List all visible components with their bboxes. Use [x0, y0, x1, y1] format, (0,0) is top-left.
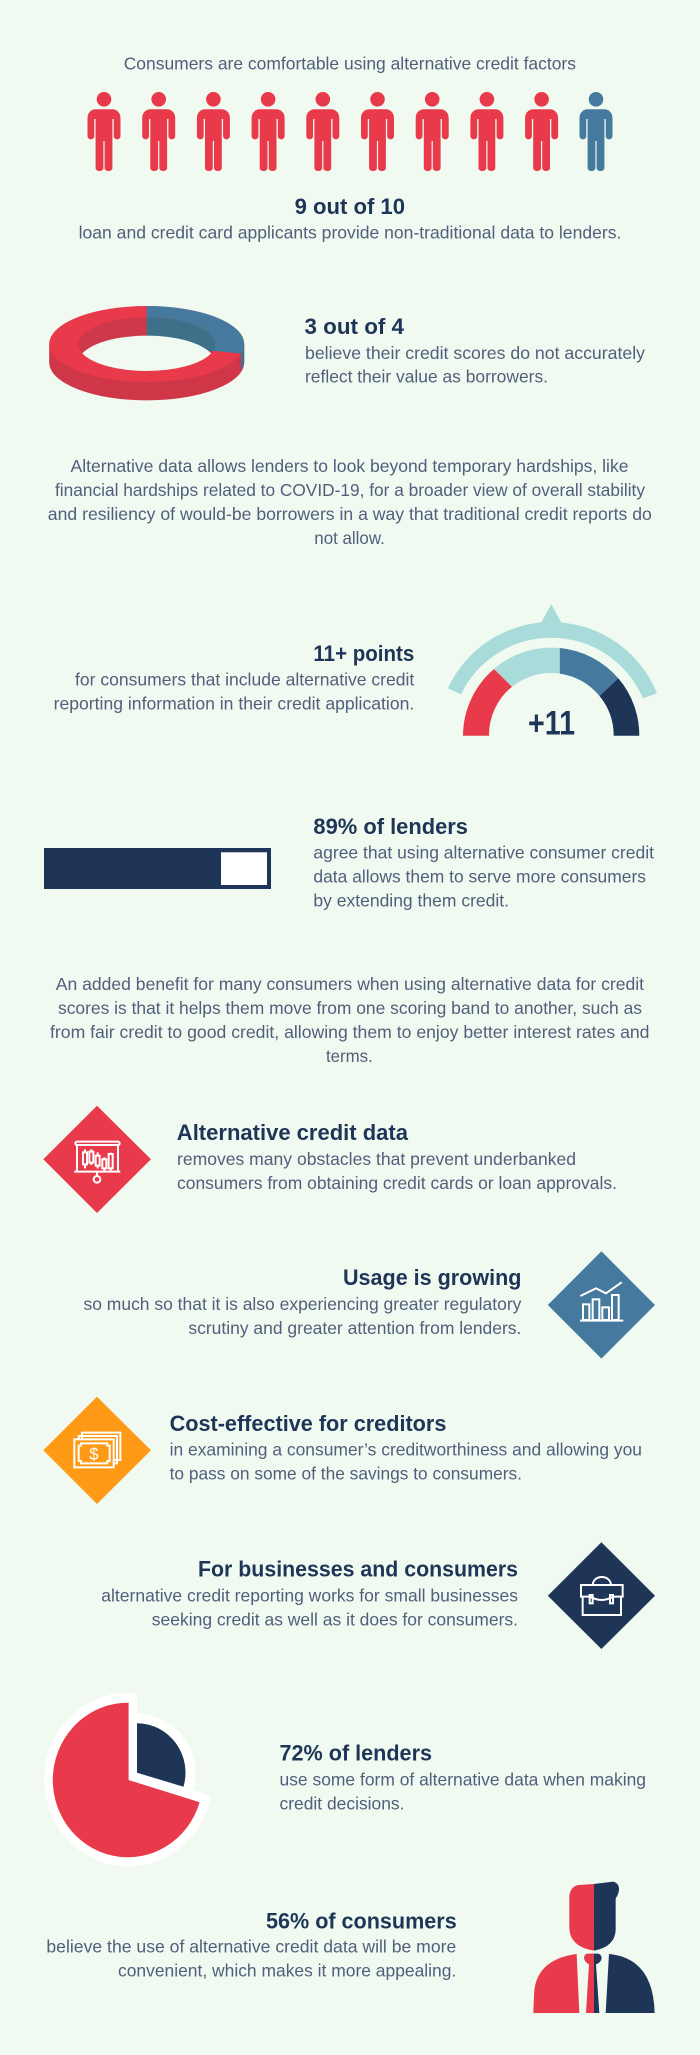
stat: 56% of consumers: believe the use of alternative credit data will be more — [46, 1937, 456, 1957]
3D donut chart — [49, 306, 244, 400]
stat: 3 out of 4: reflect their value as borrowers. — [305, 367, 548, 387]
stat: Usage is growing: Usage is growing — [343, 1265, 521, 1290]
person 6 — [361, 92, 394, 171]
person 4 — [252, 92, 285, 171]
paragraph: temporary hardships: and resiliency of would-be borrowers in a way that traditional credit reports do — [48, 504, 652, 524]
stat: For businesses and consumers: For businesses and consumers — [198, 1557, 518, 1582]
stat: 89% of lenders: by extending them credit. — [313, 891, 509, 911]
stat: 9 out of 10 — [79, 194, 621, 242]
paragraph: temporary hardships: financial hardships related to COVID-19, for a broader view of overall stability — [55, 480, 645, 500]
stat: For businesses and consumers: alternative credit reporting works for small businesses — [101, 1586, 518, 1606]
stat: 11+ points: 11+ points — [313, 641, 414, 666]
progress bar: 89% — [44, 848, 271, 889]
stat: 9 out of 10: 9 out of 10 — [295, 194, 405, 219]
person 9 — [525, 92, 558, 171]
icon: presentation board on red diamond — [43, 1106, 151, 1213]
stat: 11+ points: reporting information in their credit application. — [54, 693, 414, 713]
icon: businessman — [533, 1882, 655, 2013]
person 5 — [306, 92, 339, 171]
stat: Usage is growing — [84, 1265, 522, 1338]
paragraph: scoring band benefit: An added benefit for many consumers when using alternative data for credit — [56, 974, 644, 994]
stat: 3 out of 4: believe their credit scores do not accurately — [305, 343, 645, 363]
gauge: +11: +11 — [528, 704, 575, 742]
icon: banknotes on orange diamond — [43, 1397, 151, 1504]
paragraph: scoring band benefit: terms. — [326, 1046, 373, 1066]
stat: 11+ points — [54, 641, 414, 713]
paragraph: scoring band benefit — [50, 974, 649, 1066]
title: Consumers are comfortable using alternative credit factors — [124, 53, 576, 73]
stat: 72% of lenders — [280, 1741, 646, 1813]
stat: 89% of lenders — [313, 814, 654, 911]
stat: 3 out of 4 — [304, 314, 645, 387]
stat: 72% of lenders: 72% of lenders — [280, 1741, 432, 1766]
pictogram: 9 of 10 people — [88, 92, 612, 171]
stat: For businesses and consumers: seeking credit as well as it does for consumers. — [152, 1610, 518, 1630]
paragraph: temporary hardships: not allow. — [314, 528, 385, 548]
stat: Alternative credit data: consumers from obtaining credit cards or loan approvals. — [177, 1173, 617, 1193]
icon: banknotes on orange diamond: $ — [89, 1444, 98, 1463]
person 7 — [416, 92, 449, 171]
stat: 72% of lenders: use some form of alternative data when making — [280, 1769, 646, 1789]
paragraph: scoring band benefit: from fair credit to good credit, allowing them to enjoy better interest rates and — [50, 1022, 649, 1042]
stat: 56% of consumers — [46, 1908, 457, 1981]
stat: Usage is growing: so much so that it is also experiencing greater regulatory — [84, 1294, 522, 1314]
person 2 — [142, 92, 175, 171]
stat: 56% of consumers: 56% of consumers — [266, 1908, 457, 1933]
person 1 — [88, 92, 120, 171]
person 8 — [470, 92, 503, 171]
stat: 72% of lenders: credit decisions. — [280, 1793, 404, 1813]
stat: 89% of lenders: agree that using alternative consumer credit — [313, 843, 654, 863]
stat: Alternative credit data — [177, 1120, 617, 1193]
stat: Cost-effective for creditors — [170, 1411, 642, 1483]
stat: Alternative credit data: Alternative credit data — [177, 1120, 409, 1145]
paragraph: temporary hardships — [48, 456, 652, 548]
stat: Cost-effective for creditors: to pass on some of the savings to consumers. — [170, 1463, 522, 1483]
stat: Cost-effective for creditors: Cost-effective for creditors — [170, 1411, 446, 1436]
stat: 89% of lenders: 89% of lenders — [313, 814, 468, 839]
stat: 56% of consumers: convenient, which makes it more appealing. — [118, 1961, 456, 1981]
stat: Usage is growing: scrutiny and greater attention from lenders. — [188, 1318, 521, 1338]
stat: 9 out of 10: loan and credit card applicants provide non-traditional data to lenders. — [79, 222, 621, 242]
gauge: +11 — [448, 604, 657, 742]
paragraph: temporary hardships: Alternative data allows lenders to look beyond temporary hardships, like — [70, 456, 628, 476]
stat: 11+ points: for consumers that include alternative credit — [75, 670, 414, 690]
stat: 3 out of 4: 3 out of 4 — [304, 314, 405, 339]
stat: For businesses and consumers — [101, 1557, 518, 1630]
paragraph: scoring band benefit: scores is that it helps them move from one scoring band to another, such as — [58, 998, 642, 1018]
person 10 — [580, 92, 612, 171]
stat: 89% of lenders: data allows them to serve more consumers — [313, 867, 646, 887]
icon: briefcase on navy diamond — [548, 1542, 655, 1649]
pie chart: 72% — [44, 1693, 211, 1866]
icon: growth chart on blue diamond — [548, 1251, 655, 1359]
person 3 — [197, 92, 230, 171]
stat: Cost-effective for creditors: in examining a consumer’s creditworthiness and allowing you — [170, 1440, 642, 1460]
stat: Alternative credit data: removes many obstacles that prevent underbanked — [177, 1149, 576, 1169]
